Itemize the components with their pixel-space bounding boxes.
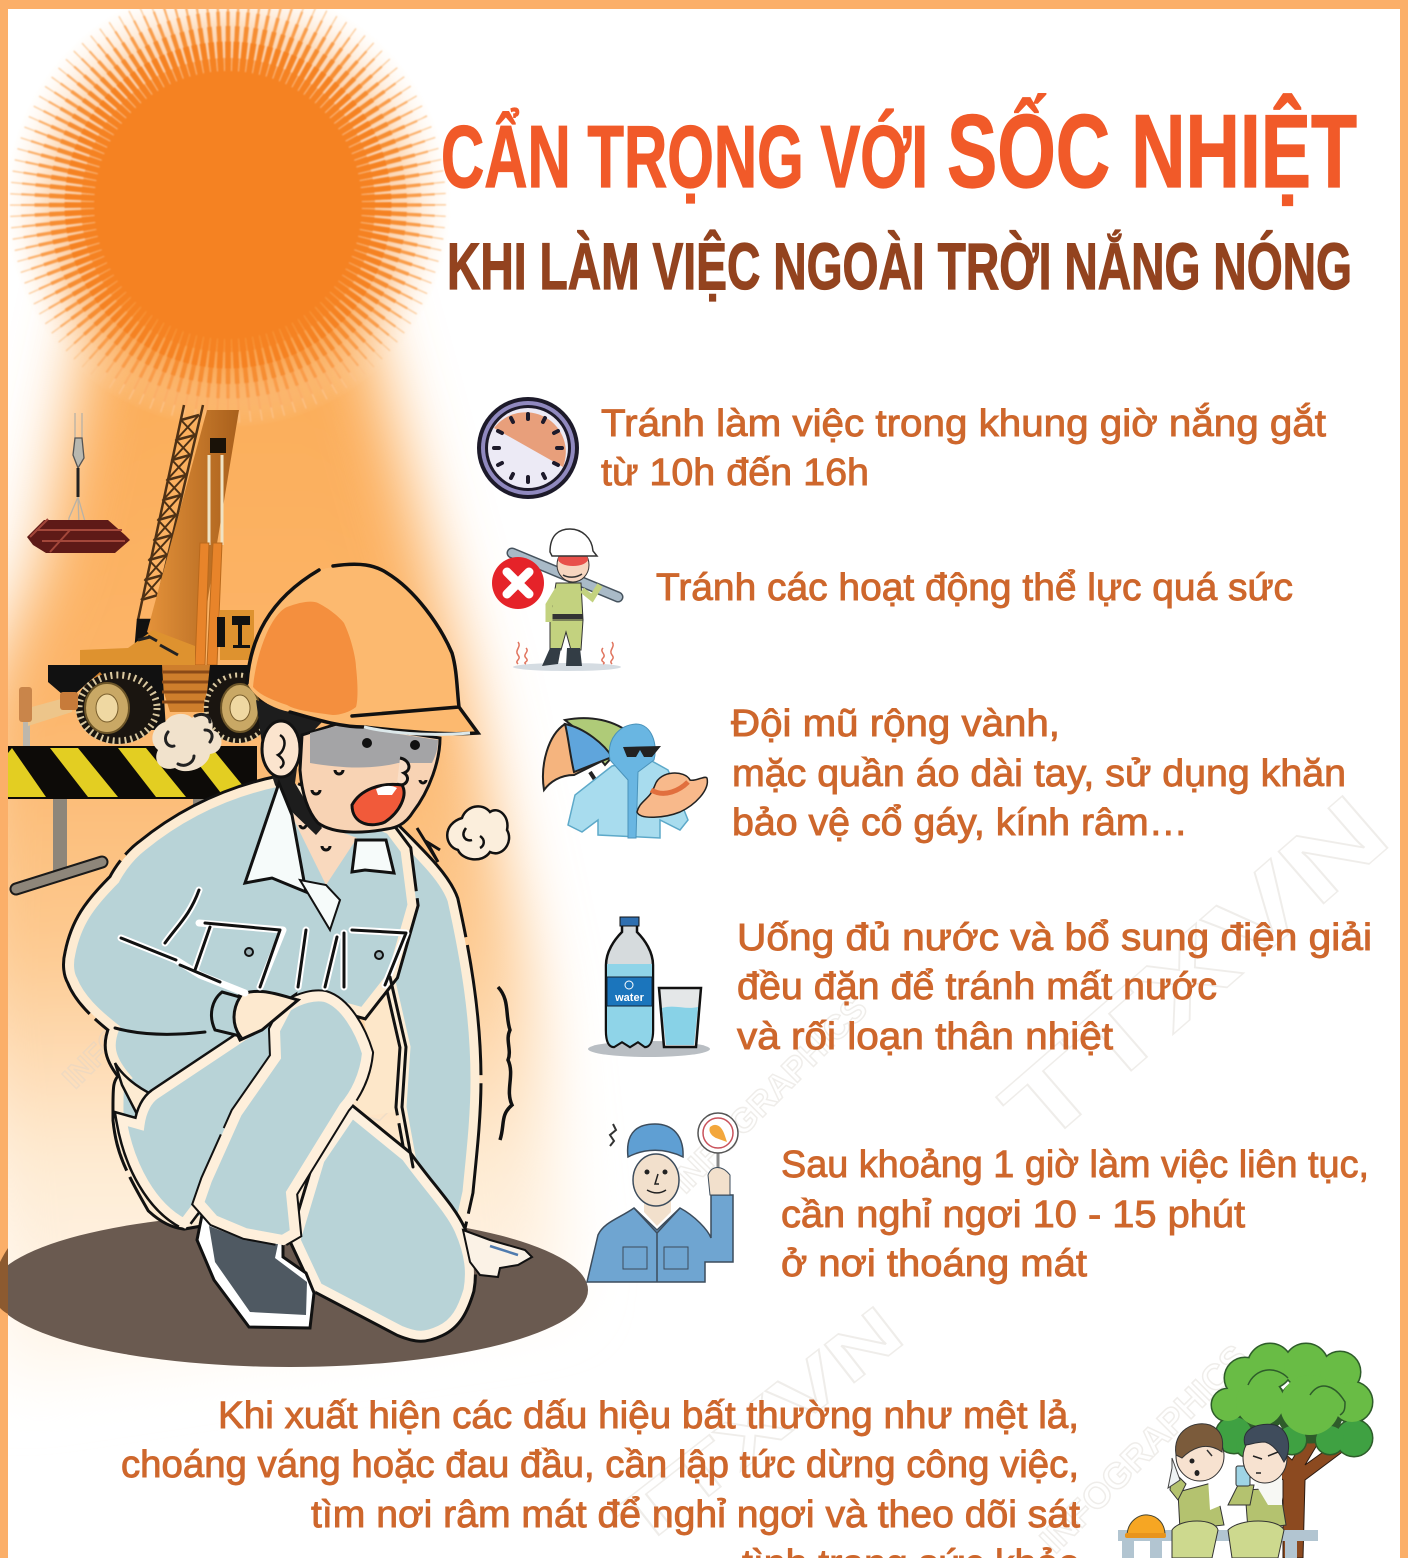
worker shake marks (498, 987, 512, 1140)
crane (19, 405, 272, 748)
sun glow (0, 230, 565, 1385)
red cross badge (492, 557, 544, 609)
worker face (300, 723, 440, 850)
tree canopy (1212, 1344, 1372, 1457)
worker sleeve cuff and hand (211, 991, 298, 1040)
crane wheel right (204, 673, 272, 743)
text: protective clothing: mặc quần áo dài tay, sử dụng khăn (732, 753, 1346, 795)
helmet on bench (1125, 1515, 1166, 1538)
crane main boom (147, 410, 239, 665)
worker cream underlay (350, 980, 410, 1118)
worker hand on ground (463, 1230, 532, 1277)
puff of breath right (447, 806, 509, 859)
title: CẨN TRỌNG VỚI (441, 107, 928, 206)
sun hat (637, 773, 707, 817)
crane cab (217, 610, 254, 660)
bottle: water (614, 992, 645, 1004)
worker thigh (122, 1007, 287, 1223)
tree trunk (1245, 1430, 1345, 1558)
text: protective clothing: bảo vệ cổ gáy, kính râm… (732, 802, 1188, 844)
watermarks: TTXVN (601, 1291, 917, 1558)
puff of breath left (152, 714, 222, 771)
crane lattice boom (135, 405, 203, 655)
worker neck (290, 812, 357, 885)
worker collar (245, 783, 394, 930)
text: avoid peak sun hours: Tránh làm việc trong khung giờ nắng gắt (601, 402, 1326, 445)
text: hydration: và rối loạn thân nhiệt (737, 1016, 1113, 1058)
title (441, 94, 1357, 303)
breath lines (417, 828, 440, 862)
text: hydration: đều đặn để tránh mất nước (737, 966, 1217, 1008)
barrier board (5, 746, 257, 799)
watermarks (57, 774, 1408, 1558)
worker boot (197, 1210, 314, 1328)
icon: water bottle and glass (588, 917, 710, 1057)
icon: worker on break (587, 1113, 738, 1282)
worker strap and hair (256, 700, 322, 835)
text: hydration (737, 917, 1372, 1058)
watermarks: INFOGRAPHICS (57, 909, 243, 1095)
text: avoid peak sun hours (601, 402, 1326, 494)
text: rest breaks (781, 1144, 1369, 1285)
text: warning signs: Khi xuất hiện các dấu hiệu bất thường như mệt lả, (218, 1395, 1079, 1437)
text: warning signs (121, 1395, 1080, 1558)
text: warning signs: choáng váng hoặc đau đầu, cần lập tức dừng công việc, (121, 1444, 1079, 1486)
worker ear (262, 721, 300, 777)
crane wheel left (76, 672, 160, 744)
kneeling worker (70, 564, 532, 1335)
sunglasses (623, 746, 661, 757)
worker rear arm (390, 830, 475, 1228)
road barrier (5, 746, 257, 889)
watermarks: TTXVN (981, 774, 1408, 1167)
resting worker left (1168, 1424, 1224, 1558)
crane chassis (48, 630, 256, 730)
worker helmet (247, 564, 478, 734)
resting worker right (1228, 1424, 1289, 1558)
text: protective clothing: Đội mũ rộng vành, (731, 703, 1060, 745)
text: rest breaks: Sau khoảng 1 giờ làm việc liên tục, (781, 1144, 1369, 1186)
text: avoid peak sun hours: từ 10h đến 16h (601, 452, 869, 494)
ground shadow (0, 1213, 588, 1367)
icon: sun protective clothing (543, 718, 707, 838)
icon: clock (477, 397, 579, 499)
worker rear leg (296, 1113, 469, 1335)
crane hook and cables (66, 413, 94, 553)
crane cylinders (195, 543, 222, 665)
crane outrigger (19, 687, 78, 748)
bench (1118, 1530, 1318, 1558)
worker shin (199, 996, 367, 1240)
icon: overexerted worker (492, 529, 621, 671)
watermarks: INFOGRAPHICS (1032, 1336, 1256, 1558)
text: avoid overexertion: Tránh các hoạt động thể lực quá sức (656, 567, 1293, 609)
steel beam load (27, 519, 130, 553)
break sign (698, 1113, 738, 1170)
text: hydration: Uống đủ nước và bổ sung điện giải (737, 917, 1372, 959)
crane pulley block (210, 438, 226, 453)
hooded jacket (568, 724, 688, 838)
barrier legs (16, 797, 207, 889)
worker jacket torso (70, 782, 412, 1223)
text: warning signs: tìm nơi râm mát để nghỉ ngơi và theo dõi sát (311, 1494, 1080, 1536)
worker belt (115, 1063, 160, 1120)
text: rest breaks: cần nghỉ ngơi 10 - 15 phút (781, 1194, 1245, 1236)
glass (659, 988, 701, 1047)
illustration: workers resting under a tree (1118, 1344, 1372, 1558)
umbrella (543, 718, 632, 795)
crane hydraulic rods (209, 455, 222, 545)
shadow over left border (0, 1248, 8, 1314)
sun (6, 0, 450, 427)
watermarks: TTXVN (123, 959, 498, 1334)
text: rest breaks: ở nơi thoáng mát (781, 1243, 1087, 1285)
text: protective clothing (731, 703, 1346, 844)
worker jacket details (115, 890, 413, 1167)
watermarks: INFOGRAPHICS (664, 989, 875, 1201)
